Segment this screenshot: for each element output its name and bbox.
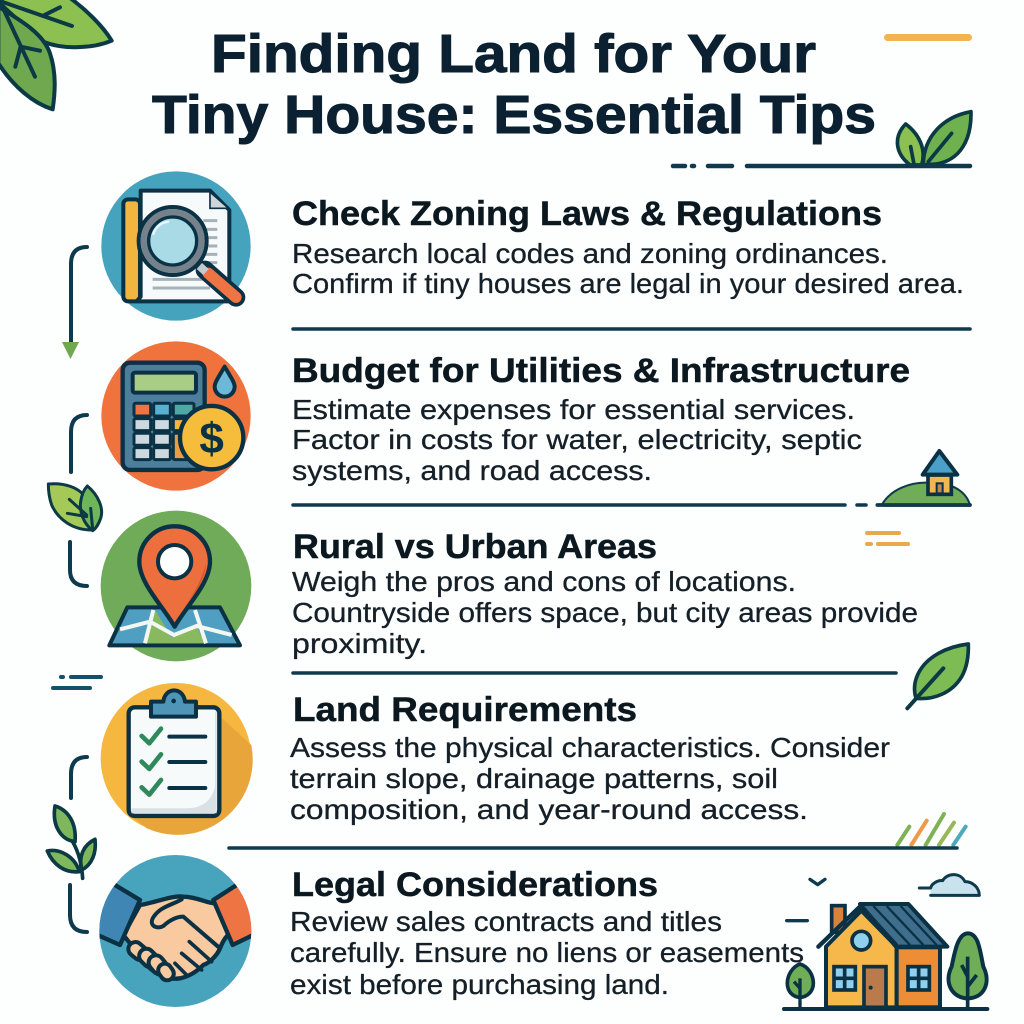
- connector: below step 2: [71, 415, 87, 472]
- accents: bird and dash: [787, 879, 825, 921]
- icon: double leaf: [48, 484, 102, 531]
- icon: calculator circle: $: [199, 414, 224, 463]
- text: land requirements body: terrain slope, drainage patterns, soil: [290, 763, 778, 794]
- divider: after step 2: [293, 503, 970, 507]
- text: budget body: systems, and road access.: [292, 455, 652, 486]
- icon: map pin circle: [101, 511, 251, 661]
- icon: tiny house scene: [784, 875, 987, 1009]
- icon: top-left leaves: [0, 0, 112, 109]
- text: check zoning body: [292, 238, 964, 299]
- icon: calculator circle: [101, 341, 251, 491]
- text: rural vs urban body: Countryside offers space, but city areas provide: [292, 597, 918, 628]
- text: legal considerations body: carefully. Ensure no liens or easements: [290, 937, 804, 968]
- ground: [784, 1003, 987, 1015]
- text: legal considerations body: exist before purchasing land.: [290, 969, 669, 1000]
- text: check zoning body: Confirm if tiny houses are legal in your desired area.: [292, 268, 964, 299]
- text: land requirements body: composition, and year-round access.: [290, 794, 808, 825]
- title: Tiny House: Essential Tips: [152, 85, 876, 145]
- text: budget body: [292, 394, 862, 486]
- text: rural vs urban body: Weigh the pros and cons of locations.: [292, 566, 796, 597]
- icon: clipboard circle: [101, 683, 253, 835]
- heading: land requirements: Land Requirements: [293, 691, 637, 729]
- heading: legal considerations: Legal Considerations: [292, 866, 658, 904]
- large tree: [949, 933, 987, 998]
- connector: step 5: [70, 885, 87, 932]
- accent: left dashes: [53, 677, 101, 688]
- text: rural vs urban body: [292, 566, 918, 659]
- connector: above step 3: [70, 542, 87, 586]
- icon: search document circle: [101, 171, 251, 321]
- cloud: [931, 875, 979, 895]
- accent: orange bar: [884, 34, 972, 41]
- text: legal considerations body: Review sales contracts and titles: [290, 906, 722, 937]
- door: [864, 967, 886, 1007]
- heading: check zoning: Check Zoning Laws & Regulations: [292, 195, 882, 233]
- right window: [908, 967, 929, 990]
- title: [152, 24, 876, 145]
- connector: step 1 to step 2 arrow: [62, 247, 87, 359]
- divider: after step 1: [293, 327, 970, 331]
- icon: sprig: [47, 806, 95, 878]
- heading: budget: Budget for Utilities & Infrastructure: [292, 352, 910, 390]
- icon: handshake circle: [99, 855, 252, 1007]
- heading: rural vs urban: Rural vs Urban Areas: [293, 528, 657, 566]
- text: budget body: Factor in costs for water, electricity, septic: [292, 424, 862, 455]
- house body: [826, 911, 897, 1007]
- left window: [834, 967, 855, 990]
- text: land requirements body: [290, 732, 890, 825]
- round window: [852, 931, 871, 950]
- icon: small house on hill: [877, 451, 970, 505]
- icon: sprout on title rule: [897, 112, 971, 165]
- accent: colored grass strokes: [897, 814, 966, 845]
- text: rural vs urban body: proximity.: [292, 628, 427, 659]
- text: check zoning body: Research local codes and zoning ordinances.: [292, 238, 888, 269]
- icon: single leaf: [907, 644, 968, 708]
- accent: orange dashes: [867, 533, 908, 544]
- divider: title rule: [673, 164, 970, 168]
- text: land requirements body: Assess the physical characteristics. Consider: [290, 732, 890, 763]
- connector: step 4: [71, 757, 87, 798]
- small tree: [787, 964, 813, 997]
- divider: after step 3: [293, 671, 896, 675]
- text: budget body: Estimate expenses for essential services.: [292, 394, 855, 425]
- title: Finding Land for Your: [211, 24, 816, 84]
- roof: [860, 904, 947, 947]
- divider: after step 4: [229, 846, 957, 850]
- chimney: [832, 906, 845, 932]
- text: legal considerations body: [290, 906, 804, 1000]
